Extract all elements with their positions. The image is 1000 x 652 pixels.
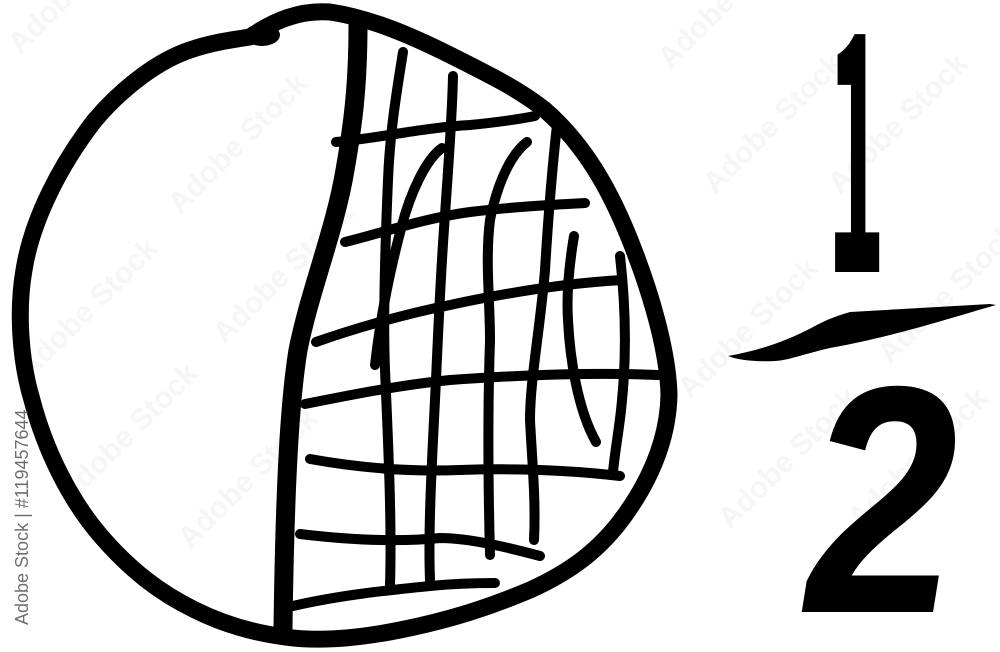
watermarks: Adobe Stock [172, 402, 325, 555]
watermarks: Adobe Stock [52, 357, 205, 510]
fraction bar [728, 304, 996, 361]
grid hatching on right half [293, 52, 658, 606]
watermarks: Adobe Stock [822, 47, 975, 200]
watermarks: Adobe Stock [842, 382, 995, 535]
vertical stock credit: Adobe Stock | #119457644 [12, 409, 32, 625]
centre dividing line [283, 25, 358, 628]
watermarks: Adobe Stock [672, 252, 825, 405]
watermarks: Adobe Stock [12, 232, 165, 385]
watermarks: Adobe Stock [697, 47, 850, 200]
watermarks: Adobe Stock [162, 67, 315, 220]
watermarks: Adobe Stock [207, 197, 360, 350]
circle outline [20, 12, 669, 639]
watermarks: Adobe Stock [712, 382, 865, 535]
